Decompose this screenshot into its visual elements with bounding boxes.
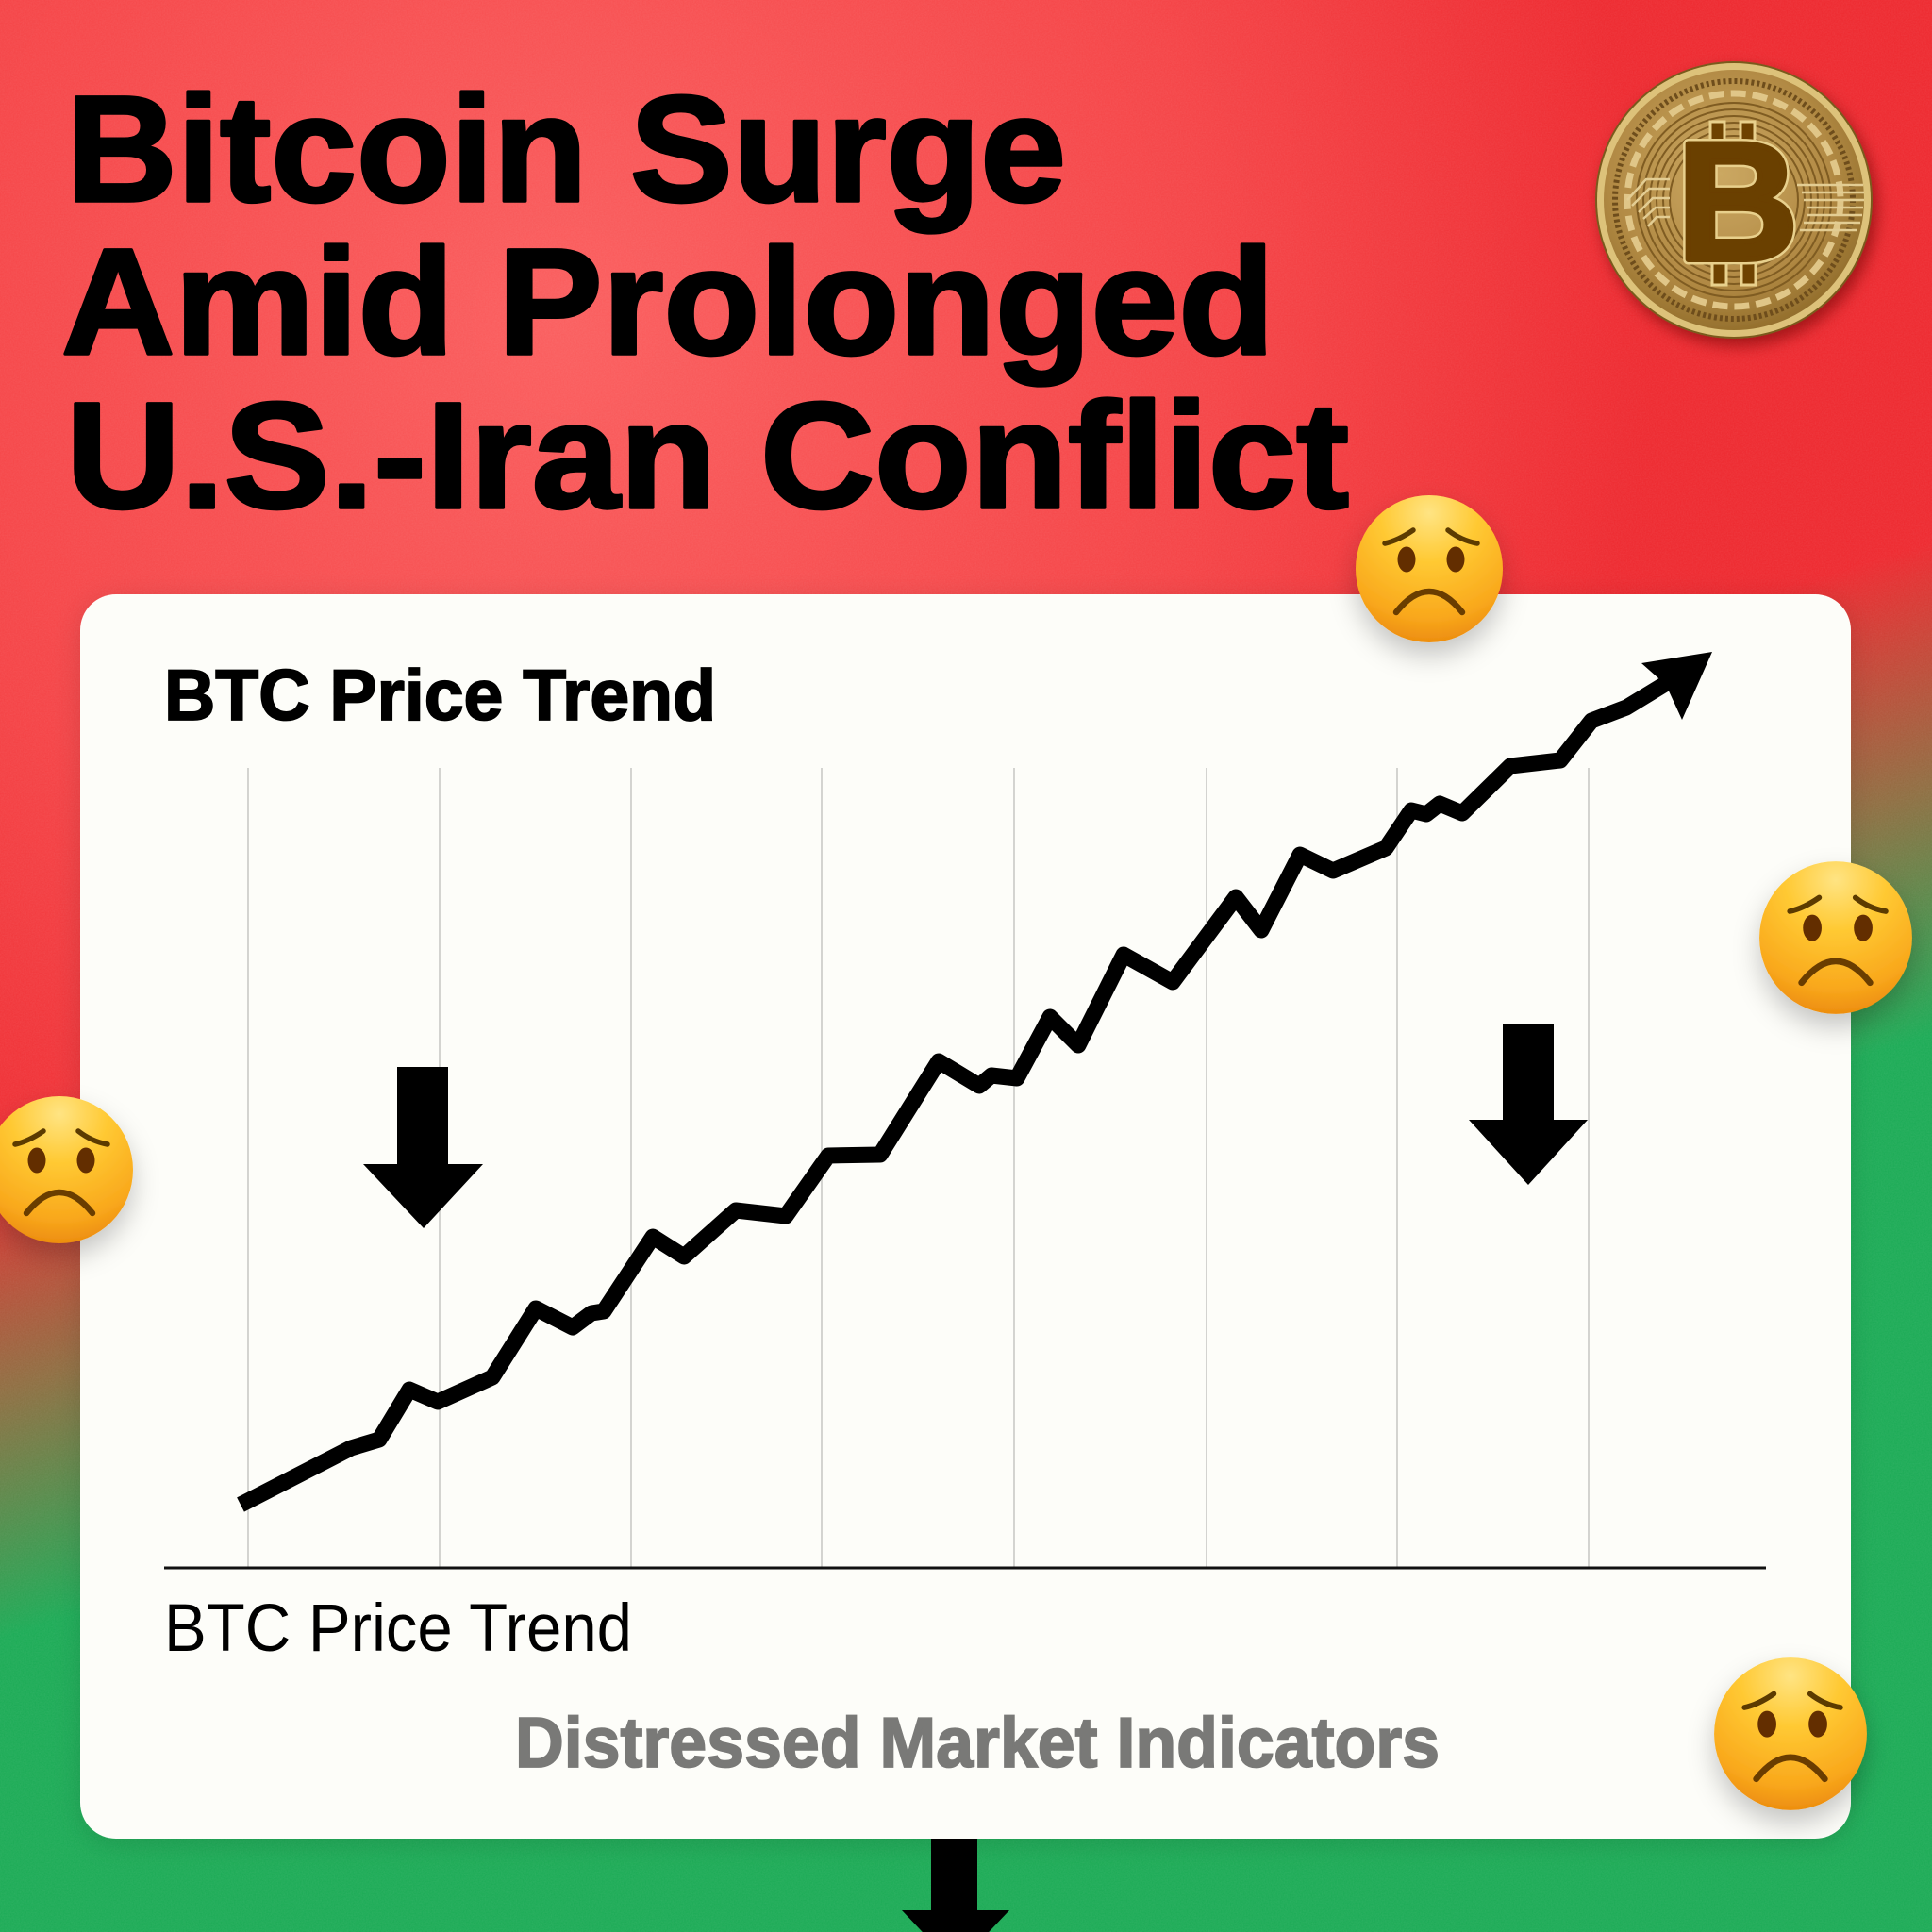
icon: sad emoji bottom right bbox=[1714, 1657, 1867, 1810]
title: Amid Prolonged bbox=[61, 217, 1274, 386]
title bbox=[61, 64, 1349, 540]
icon: sad emoji top bbox=[1356, 495, 1503, 642]
icon: sad emoji right bbox=[1759, 861, 1912, 1014]
icon: bitcoin B symbol: B bbox=[1677, 108, 1798, 295]
axis label: BTC Price Trend bbox=[164, 1591, 632, 1666]
line chart: rising BTC price with arrow head bbox=[241, 652, 1712, 1505]
caption: distressed market indicators: Distressed Market Indicators bbox=[515, 1703, 1440, 1782]
chart grid lines and axis bbox=[164, 768, 1766, 1568]
icon: bitcoin B symbol: B bbox=[1677, 108, 1798, 295]
panel: chart card bbox=[80, 594, 1851, 1839]
circuit traces bbox=[1627, 179, 1864, 230]
chart heading: BTC Price Trend bbox=[164, 656, 716, 736]
title: Bitcoin Surge bbox=[66, 64, 1066, 233]
down arrow: left bbox=[363, 1067, 483, 1228]
title: U.S.-Iran Conflict bbox=[66, 371, 1349, 540]
down arrow: bottom bbox=[902, 1839, 1009, 1932]
icon: bitcoin coin bbox=[1595, 61, 1873, 339]
icon: sad emoji left bbox=[0, 1096, 133, 1243]
down arrow: right bbox=[1469, 1024, 1588, 1185]
